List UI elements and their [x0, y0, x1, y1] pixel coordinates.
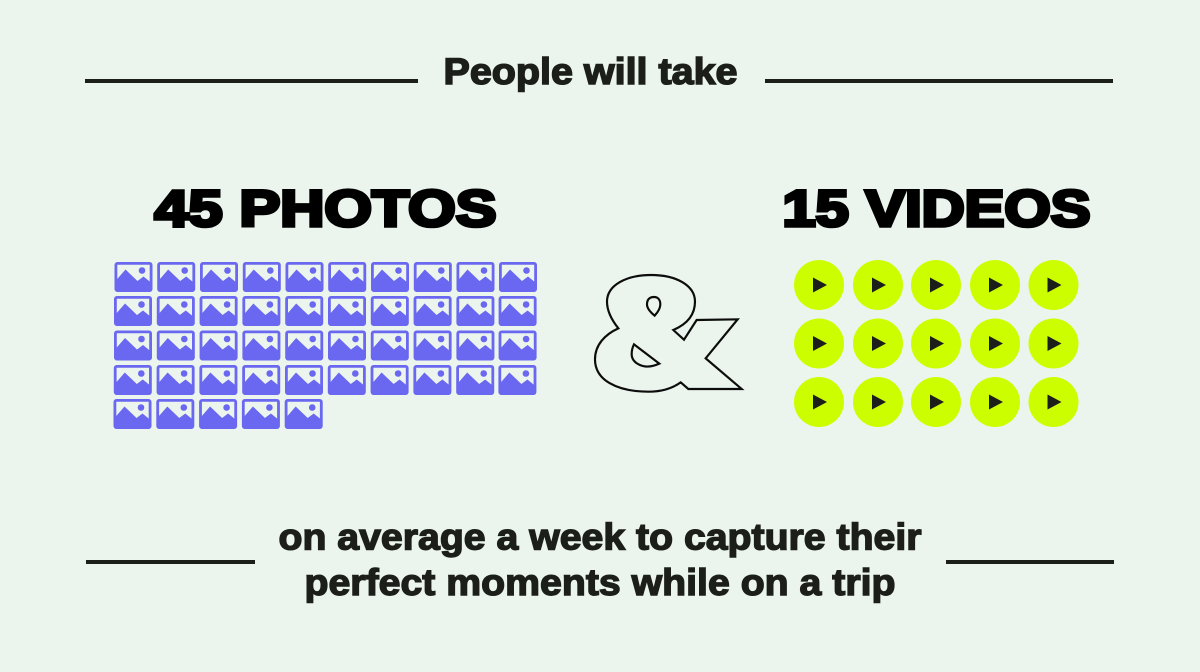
caption text: perfect moments while on a trip [304, 562, 896, 603]
heading: 45 photos: 45 PHOTOS [154, 180, 496, 237]
caption text: on average a week to capture their [278, 516, 922, 558]
bottom rule left [86, 560, 255, 564]
icon grid: 45 photos [114, 263, 536, 429]
icon grid: 15 videos [794, 260, 1078, 427]
ampersand outline [595, 275, 742, 392]
heading: 15 videos: 15 VIDEOS [782, 180, 1090, 237]
heading: people will take: People will take [444, 51, 738, 92]
top rule right [765, 79, 1113, 83]
caption text [278, 516, 922, 603]
top rule left [85, 79, 418, 83]
bottom rule right [946, 560, 1114, 564]
